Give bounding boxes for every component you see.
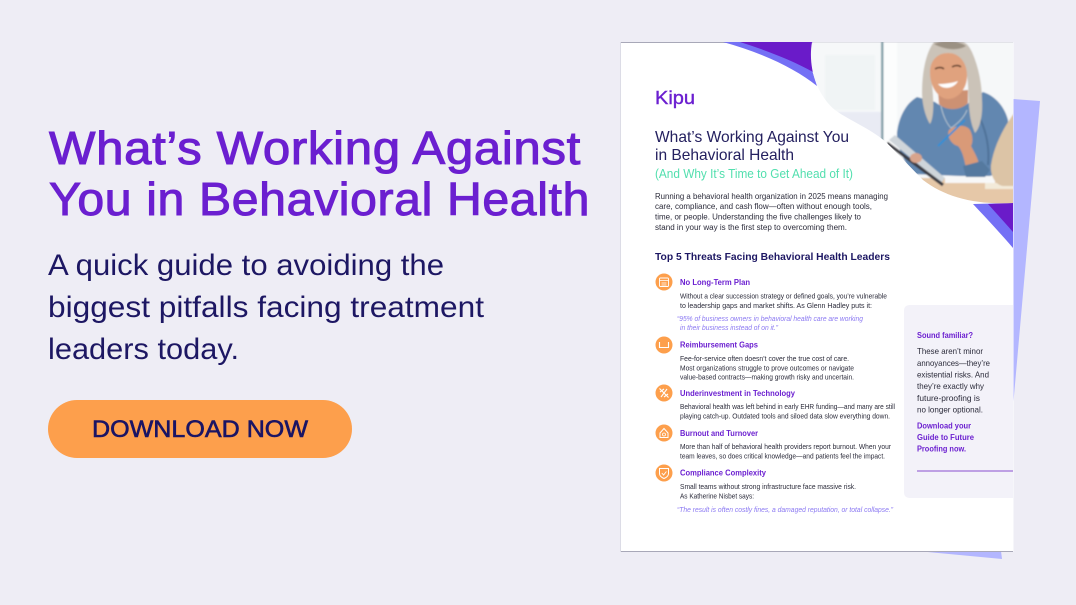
intro paragraph: time, or people. Understanding the five challenges likely to	[655, 212, 862, 222]
document sub-heading: (And Why It’s Time to Get Ahead of It)	[655, 167, 853, 181]
sidebar callout: Download your	[917, 422, 971, 430]
intro paragraph: Running a behavioral health organization in 2025 means managing	[655, 192, 888, 201]
sidebar callout	[904, 305, 1013, 498]
threat 2: reimbursement gaps: value-based contracts—making growth risky and uncertain.	[680, 372, 854, 382]
neck	[938, 90, 968, 109]
document heading	[655, 129, 849, 164]
threats heading: Top 5 Threats Facing Behavioral Health Leaders	[655, 251, 890, 263]
threat 2: reimbursement gaps: Fee-for-service often doesn’t cover the true cost of care.	[680, 354, 849, 363]
icon: shield check	[656, 464, 672, 482]
hair	[922, 42, 982, 133]
sidebar callout: Sound familiar?	[917, 331, 973, 340]
necklace	[941, 106, 967, 128]
main title	[49, 122, 590, 225]
subtitle	[48, 249, 484, 366]
threat 5: compliance complexity: Compliance Complexity	[680, 468, 767, 478]
threat 4: burnout and turnover: Burnout and Turnover	[680, 429, 758, 438]
logo: Kipu: Kipu	[655, 87, 695, 108]
sidebar callout: future-proofing is	[917, 394, 980, 403]
other person's arm	[991, 112, 1015, 186]
threat 2: reimbursement gaps	[656, 336, 854, 382]
icon: unplugged	[656, 384, 672, 402]
threat 1: no long-term plan: “95% of business owners in behavioral health care are working	[677, 314, 864, 323]
tablet	[889, 135, 945, 183]
intro paragraph: care, compliance, and cash flow—often without enough tools,	[655, 202, 872, 211]
threat 4: burnout and turnover: team leaves, so does critical knowledge—and patients feel the impact.	[680, 452, 885, 460]
main title: What’s Working Against	[49, 122, 581, 174]
threat 1: no long-term plan: to leadership gaps and market shifts. As Glenn Hadley puts it:	[680, 301, 872, 310]
threat 1: no long-term plan: in their business instead of on it.”	[680, 323, 778, 332]
threat 1: no long-term plan: No Long-Term Plan	[680, 278, 750, 287]
sidebar callout: existential risks. And	[917, 370, 989, 380]
bottom purple swoosh	[973, 203, 1013, 248]
icon: calendar	[656, 274, 672, 290]
threat 3: underinvestment in technology	[656, 384, 895, 420]
sidebar callout: Proofing now.	[917, 444, 966, 454]
threat 3: underinvestment in technology: Behavioral health was left behind in early EHR funding—and many are still	[680, 402, 895, 411]
threat 2: reimbursement gaps: Reimbursement Gaps	[680, 340, 759, 350]
threat 4: burnout and turnover: More than half of behavioral health providers report burnout. When your	[680, 442, 891, 451]
sleeve shading	[980, 120, 990, 165]
threat 5: compliance complexity: “The result is often costly fines, a damaged reputation, or total collapse.”	[677, 505, 893, 514]
threat 5: compliance complexity: As Katherine Nisbet says:	[680, 492, 754, 500]
threat 1: no long-term plan	[656, 274, 887, 332]
table	[920, 177, 1013, 204]
intro paragraph: stand in your way is the first step to overcoming them.	[655, 223, 847, 232]
document heading: What’s Working Against You	[655, 129, 849, 146]
pen	[938, 120, 965, 146]
top purple swoosh	[723, 42, 817, 86]
icon: flame house	[656, 424, 672, 442]
button: download now	[48, 400, 352, 458]
document page	[620, 41, 1015, 552]
sidebar callout: annoyances—they’re	[917, 359, 990, 368]
sweater	[897, 92, 1009, 177]
subtitle: leaders today.	[48, 333, 239, 366]
threat 3: underinvestment in technology: playing catch-up. Outdated tools and siloed data slow everything down.	[680, 412, 890, 420]
sidebar callout: These aren’t minor	[917, 347, 983, 356]
threat 3: underinvestment in technology: Underinvestment in Technology	[680, 389, 796, 398]
back sheet	[917, 99, 1040, 559]
face	[930, 53, 967, 99]
threat 4: burnout and turnover	[656, 424, 891, 460]
icon: tray	[656, 336, 672, 354]
sidebar callout: Guide to Future	[917, 433, 975, 442]
sidebar callout: no longer optional.	[917, 406, 983, 414]
threat 2: reimbursement gaps: Most organizations struggle to prove outcomes or navigate	[680, 364, 854, 372]
sidebar callout: they’re exactly why	[917, 382, 985, 391]
subtitle: A quick guide to avoiding the	[48, 249, 444, 282]
document heading: in Behavioral Health	[655, 147, 794, 164]
threat 1: no long-term plan: Without a clear succession strategy or defined goals, you’re vulnerable	[680, 292, 887, 300]
intro paragraph	[655, 192, 888, 232]
button: download now: DOWNLOAD NOW	[92, 416, 308, 443]
main title: You in Behavioral Health	[49, 173, 590, 225]
hand on tablet	[910, 153, 922, 163]
threat 5: compliance complexity: Small teams without strong infrastructure face massive risk.	[680, 482, 856, 491]
subtitle: biggest pitfalls facing treatment	[48, 291, 484, 324]
sleeve cuff	[963, 161, 990, 177]
threat 5: compliance complexity	[656, 464, 893, 514]
photo: smiling woman with tablet	[805, 41, 1015, 207]
forearm and hand	[948, 126, 979, 168]
